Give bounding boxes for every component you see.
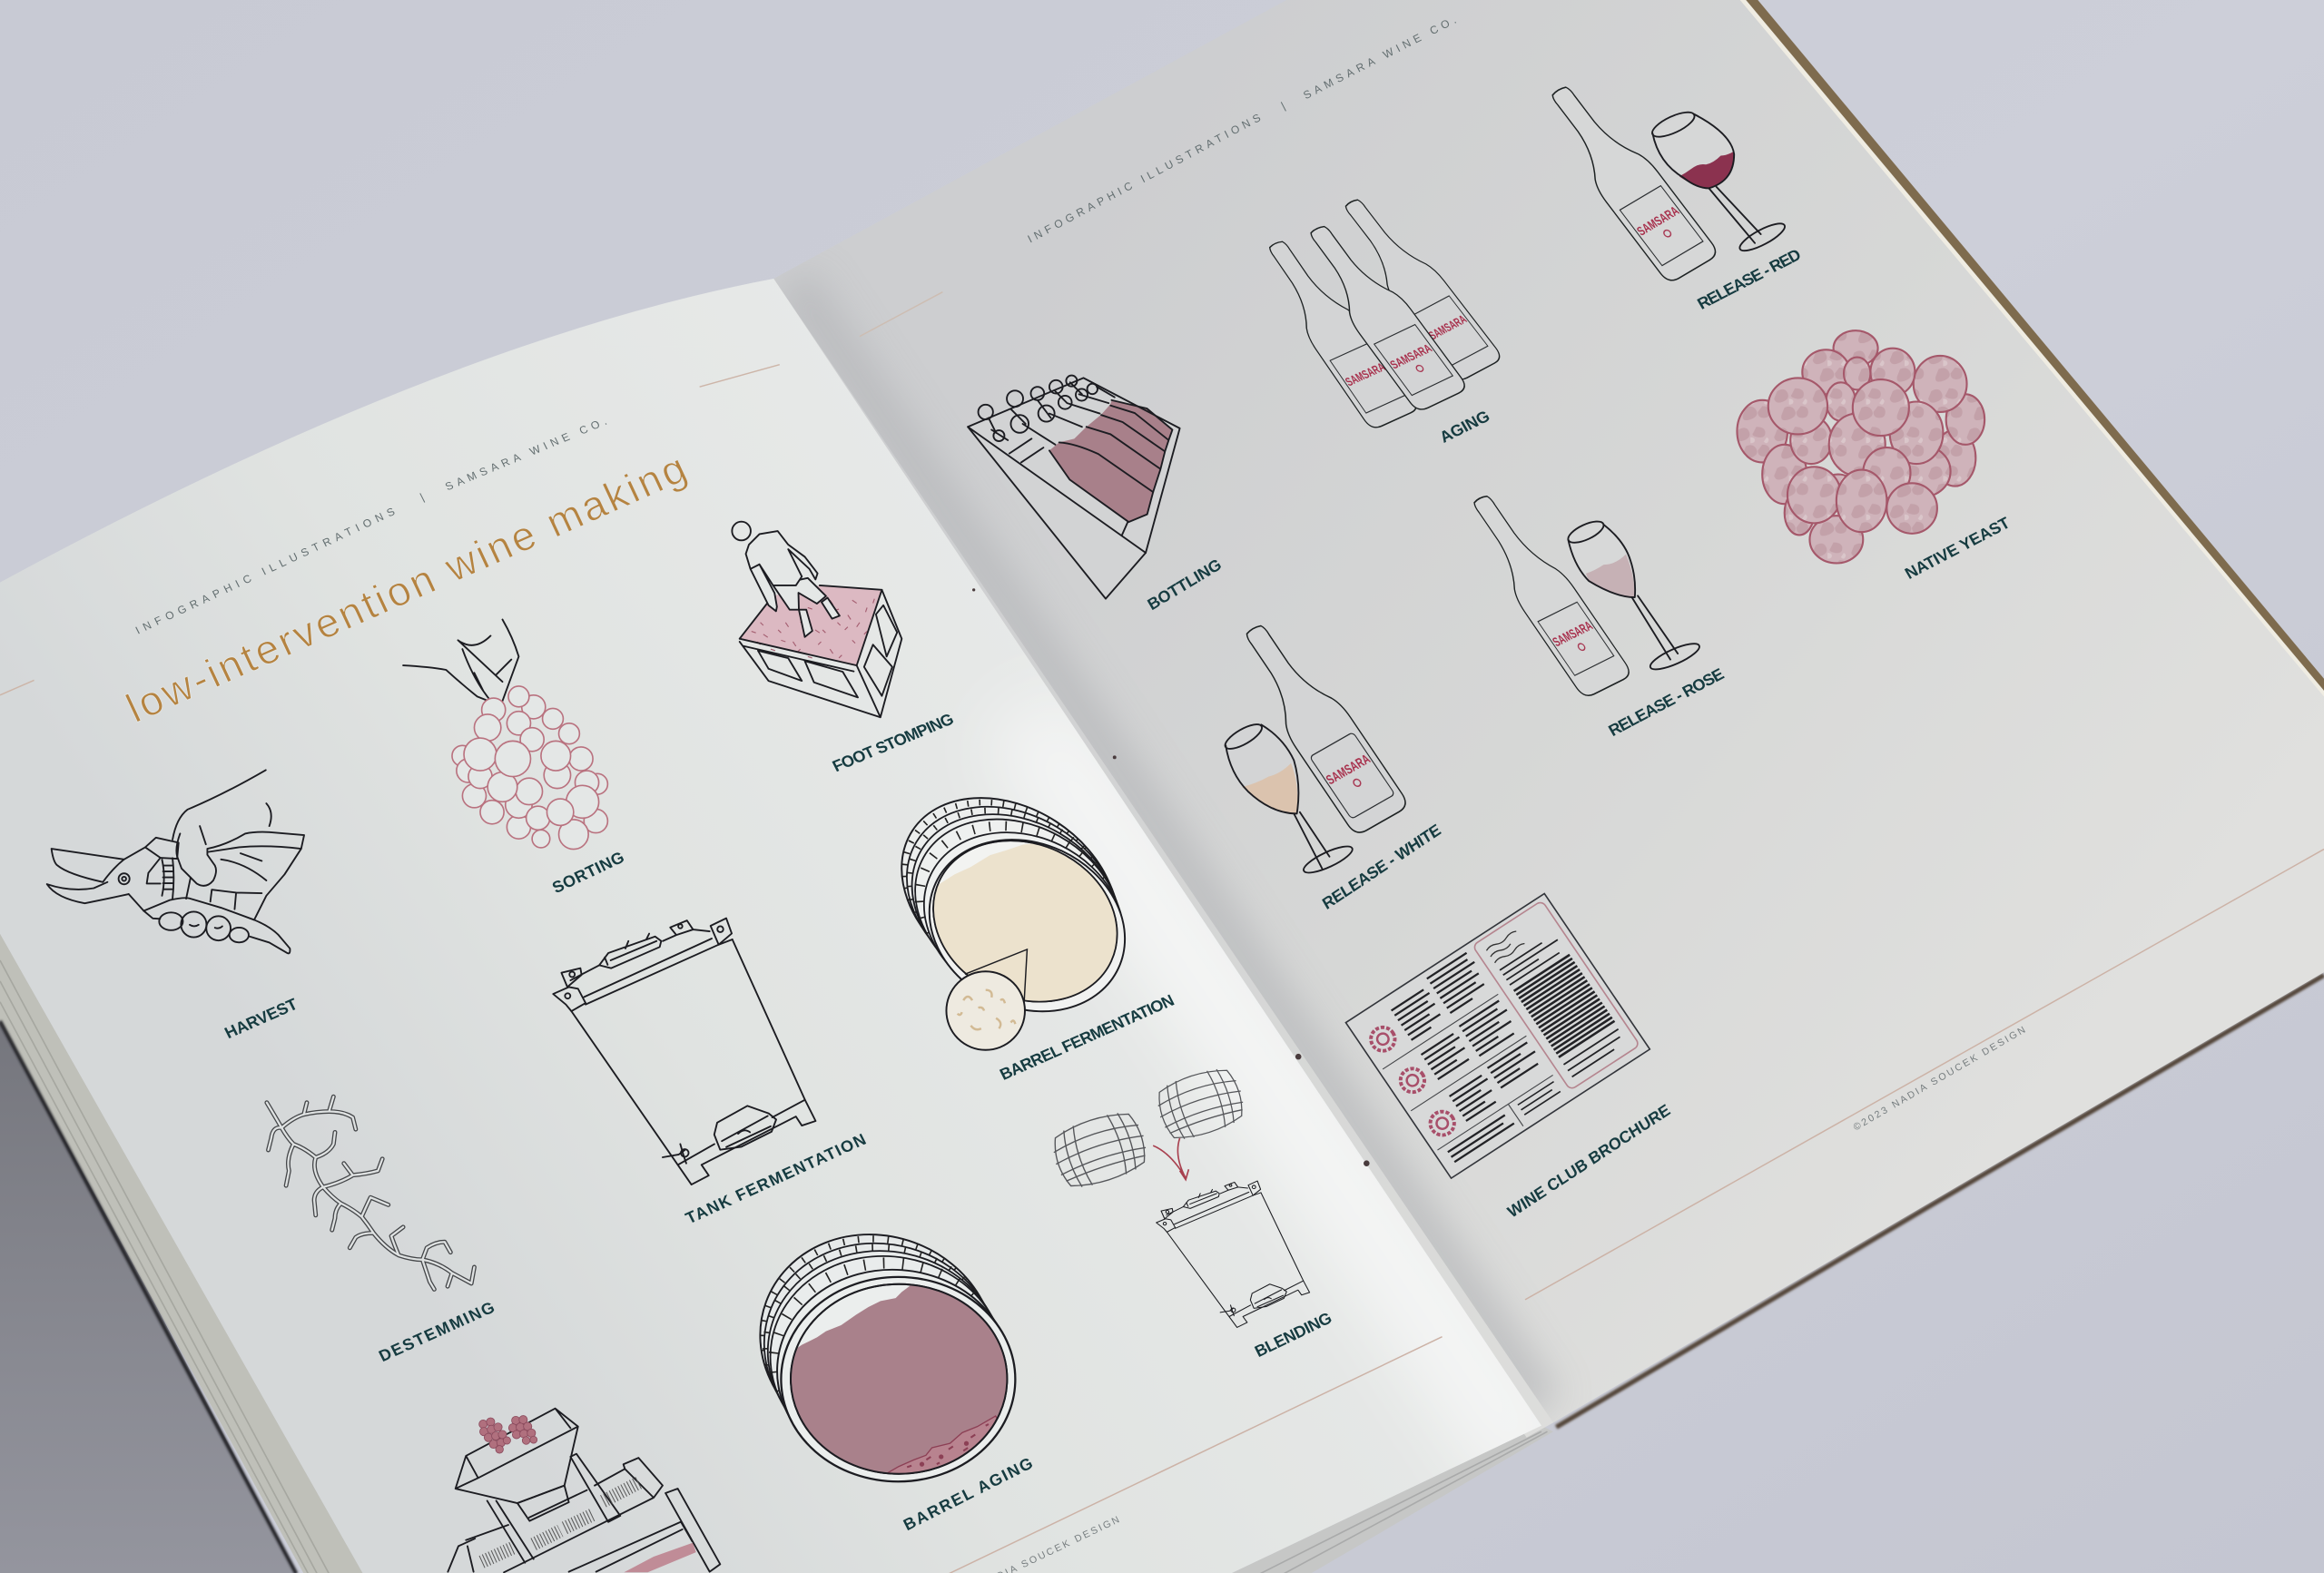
illustration: foot stomping — [732, 522, 957, 775]
arrow: barrels to tank — [1153, 1138, 1188, 1180]
footer rule: right page — [1525, 850, 2324, 1300]
illustration: aging: SAMSARA — [1387, 341, 1434, 371]
illustration: release white: SAMSARA — [1323, 751, 1373, 787]
label: foot stomping: FOOT STOMPING — [830, 710, 957, 775]
header text: right page: INFOGRAPHIC ILLUSTRATIONS — [1026, 111, 1263, 245]
fermentation detail circle — [946, 971, 1025, 1050]
header text: left page: | — [418, 491, 427, 504]
panel: right page — [748, 0, 2324, 1438]
label: release rose: RELEASE - ROSE — [1605, 664, 1727, 740]
label: blending: BLENDING — [1252, 1309, 1334, 1361]
header text: right page — [1026, 14, 1458, 245]
illustration: sorting — [403, 619, 627, 897]
illustration: destemming — [267, 1096, 497, 1365]
illustration: release red — [1532, 74, 1804, 313]
illustration: crusher destemmer — [448, 1409, 720, 1572]
illustration: aging: SAMSARA — [1426, 312, 1470, 342]
title: low-intervention wine making — [119, 445, 694, 732]
label: tank fermentation: TANK FERMENTATION — [683, 1130, 869, 1227]
illustration: release white — [1222, 614, 1444, 913]
panel: left page — [0, 279, 1549, 1573]
illustration: release rose: SAMSARA — [1550, 618, 1596, 649]
label: release white: RELEASE - WHITE — [1319, 821, 1444, 913]
illustration: native yeast — [1737, 330, 2014, 583]
illustration: blending — [1047, 1063, 1334, 1361]
label: destemming: DESTEMMING — [376, 1298, 497, 1365]
label: barrel aging: BARREL AGING — [901, 1454, 1036, 1534]
label: aging: AGING — [1436, 407, 1492, 447]
footer rule: left page — [949, 1337, 1443, 1573]
label: native yeast: NATIVE YEAST — [1902, 514, 2014, 583]
illustration: aging — [1251, 190, 1503, 447]
illustration: release red: SAMSARA — [1634, 203, 1682, 239]
header text: left page: INFOGRAPHIC ILLUSTRATIONS — [133, 505, 397, 637]
header text: right page: | — [1279, 100, 1287, 113]
illustration: barrel fermentation — [901, 797, 1175, 1080]
crop marks: left page — [0, 365, 780, 695]
left page stack edge — [0, 934, 1553, 1573]
illustration: tank fermentation — [553, 919, 869, 1227]
illustration: barrel aging — [759, 1234, 1033, 1530]
illustration: release rose — [1455, 486, 1727, 740]
label: harvest: HARVEST — [222, 995, 300, 1042]
illustration: harvest — [47, 770, 304, 1042]
label: release red: RELEASE - RED — [1694, 245, 1804, 313]
illustration: bottling — [968, 376, 1225, 614]
stitching holes — [972, 588, 1370, 1166]
label: wine club brochure: WINE CLUB BROCHURE — [1504, 1100, 1673, 1222]
footer credit: right page: ©2023 NADIA SOUCEK DESIGN — [1852, 1025, 2027, 1133]
label: barrel fermentation: BARREL FERMENTATION — [997, 991, 1177, 1084]
header text: left page — [133, 415, 609, 637]
label: bottling: BOTTLING — [1145, 555, 1225, 614]
stray crop mark: right page — [860, 292, 942, 337]
header text: right page: SAMSARA WINE CO. — [1301, 14, 1458, 102]
header text: left page: SAMSARA WINE CO. — [443, 415, 609, 493]
label: sorting: SORTING — [549, 848, 627, 897]
illustration: wine club brochure — [1345, 893, 1673, 1222]
right cork back cover edge — [1556, 0, 2324, 1427]
illustration: aging: SAMSARA — [1343, 360, 1388, 388]
